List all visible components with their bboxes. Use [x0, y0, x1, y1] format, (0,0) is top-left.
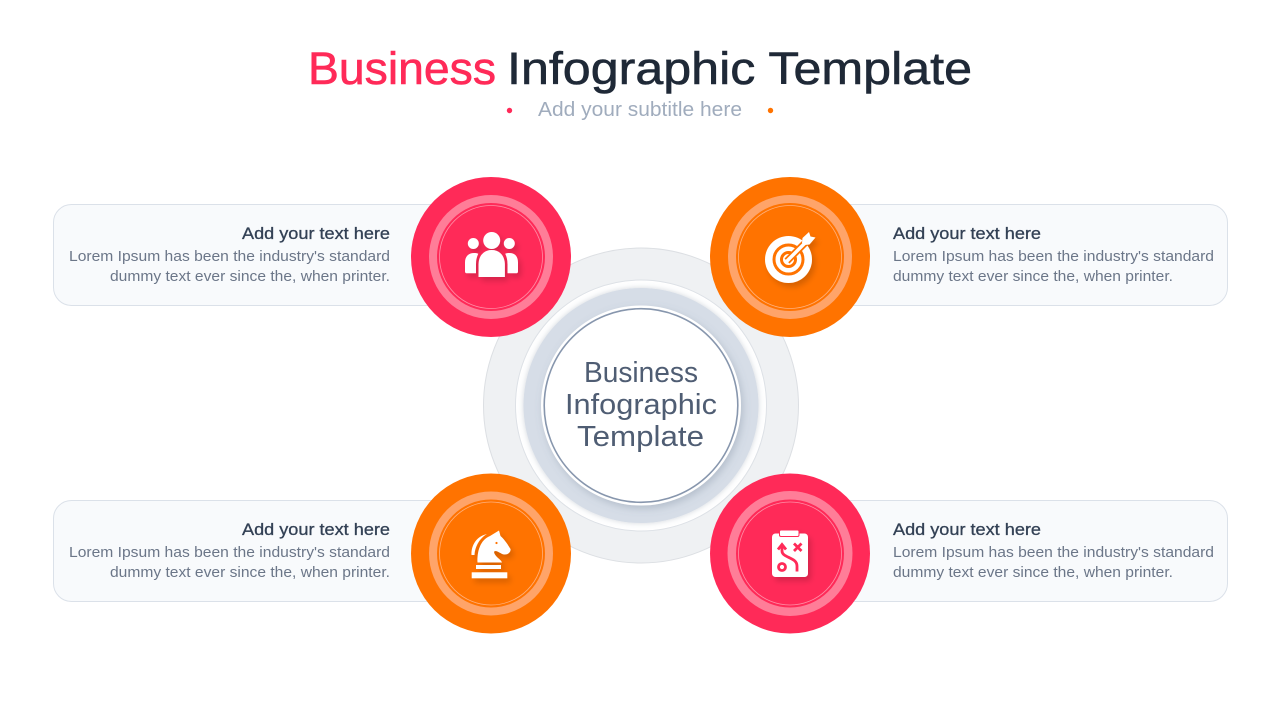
panel: card bottom right — [828, 500, 1228, 602]
hub label: Infographic — [565, 389, 717, 421]
icon: strategy clipboard — [772, 530, 808, 577]
icon: people — [465, 232, 518, 277]
panel: card top left — [54, 204, 454, 306]
text: bottom left: dummy text ever since the, when printer. — [110, 565, 390, 581]
hub label: Business — [584, 357, 698, 389]
badge: top right — [710, 177, 870, 337]
text: top left: Add your text here — [242, 224, 390, 243]
central hub — [484, 248, 798, 563]
text: top right: Lorem Ipsum has been the industry's standard — [893, 249, 1214, 265]
text: top right: dummy text ever since the, when printer. — [893, 269, 1173, 285]
hub label — [565, 357, 717, 453]
text: bottom right: Lorem Ipsum has been the industry's standard — [893, 545, 1214, 561]
title: Business — [308, 43, 496, 94]
icon: target — [765, 232, 816, 283]
text: bottom left: Lorem Ipsum has been the industry's standard — [69, 545, 390, 561]
text: bottom right — [893, 520, 1214, 581]
text: bottom right: dummy text ever since the, when printer. — [893, 565, 1173, 581]
text: bottom left: Add your text here — [242, 520, 390, 539]
badge: top left — [411, 177, 571, 337]
hub label: Template — [577, 421, 704, 453]
text: bottom left — [69, 520, 390, 581]
text: top right: Add your text here — [893, 224, 1041, 243]
subtitle: Add your subtitle here — [538, 98, 742, 121]
title: Infographic Template — [507, 43, 972, 94]
text: top right — [893, 224, 1214, 285]
title — [308, 43, 972, 94]
text: top left: dummy text ever since the, when printer. — [110, 269, 390, 285]
panel: card top right — [828, 204, 1228, 306]
panel: card bottom left — [54, 500, 454, 602]
text: top left — [69, 224, 390, 285]
icon: chess knight — [471, 530, 511, 578]
text: bottom right: Add your text here — [893, 520, 1041, 539]
text: top left: Lorem Ipsum has been the industry's standard — [69, 249, 390, 265]
badge: bottom left — [411, 474, 571, 634]
badge: bottom right — [710, 474, 870, 634]
